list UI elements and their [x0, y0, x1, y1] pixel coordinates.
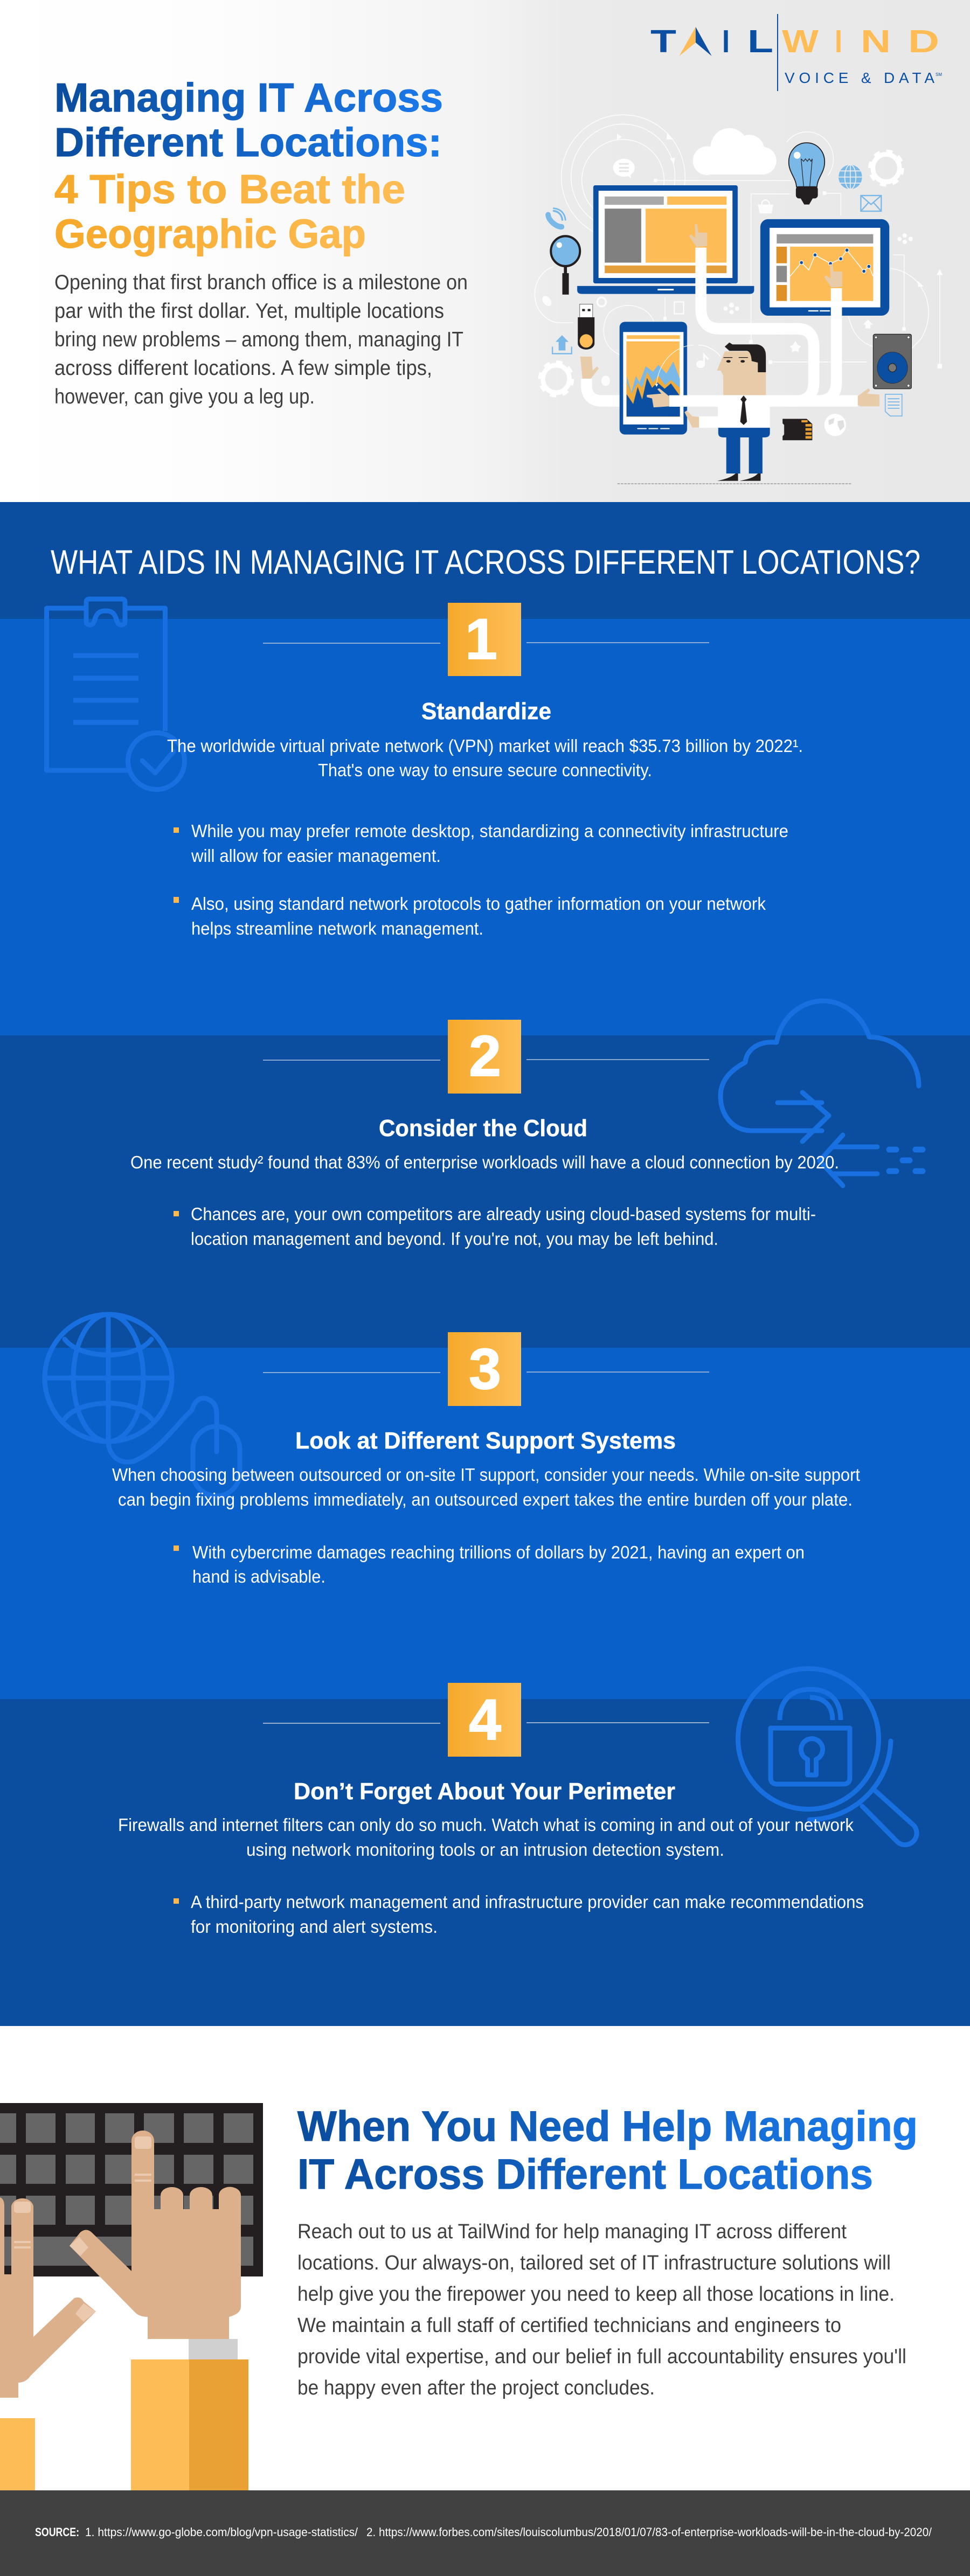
icon: light bulb [789, 143, 824, 205]
logo: TailWind Voice & Data: I [835, 24, 842, 59]
tip 3 heading: Look at Different Support Systems [295, 1428, 676, 1454]
tip 2 bullet [174, 1204, 816, 1249]
intro text [54, 271, 468, 408]
icon: sd card [782, 419, 812, 440]
call to action text: help give you the firepower you need to keep all those locations in line. [297, 2283, 895, 2306]
tip 1 paragraph: That's one way to ensure secure connectivity. [318, 760, 652, 780]
illustration: hands typing on keyboard [0, 2103, 263, 2490]
footer: sources: 1. https://www.go-globe.com/blog/vpn-usage-statistics/ [85, 2525, 358, 2539]
tip 3 bullet: With cybercrime damages reaching trillions of dollars by 2021, having an expert on [192, 1542, 805, 1562]
title [54, 75, 443, 256]
tip 1 paragraph: The worldwide virtual private network (VPN) market will reach $35.73 billion by 2022¹. [167, 736, 803, 756]
tip 2 paragraph: One recent study² found that 83% of enterprise workloads will have a cloud connection by 2020. [130, 1152, 839, 1172]
call to action text [297, 2220, 906, 2399]
logo: TailWind Voice & Data: SM [936, 72, 942, 77]
tip 1 bullet two [174, 894, 766, 938]
intro text: par with the first dollar. Yet, multiple locations [54, 300, 444, 323]
icon: globe and mouse [45, 1314, 240, 1496]
number badge 4 [263, 1683, 709, 1757]
icon: upload [552, 335, 572, 354]
tip 2 bullet: Chances are, your own competitors are already using cloud-based systems for multi- [191, 1204, 816, 1224]
icon: clipboard [46, 599, 184, 790]
icon: envelope [861, 196, 881, 211]
sleeves [189, 2339, 238, 2359]
tip 3 paragraph: can begin fixing problems immediately, an outsourced expert takes the entire burden off your plate. [118, 1489, 853, 1509]
call to action text: be happy even after the project concludes. [297, 2377, 655, 2399]
title: Managing IT Across [54, 75, 443, 120]
band: section heading [0, 502, 970, 619]
arm to left raised hand [586, 379, 621, 401]
icon: gear top right [870, 151, 902, 185]
tip 1 bullet two: helps streamline network management. [191, 918, 483, 938]
number badge 1: 1 [465, 607, 497, 671]
icon: cloud [693, 128, 777, 175]
logo: TailWind Voice & Data: I [722, 24, 730, 59]
icon: cloud with arrows [720, 1001, 923, 1186]
icon: usb drive [578, 304, 594, 350]
left hand [0, 2197, 96, 2398]
panel: tip 4 Don't Forget About Your Perimeter [0, 1669, 970, 2026]
number badge 2: 2 [469, 1024, 501, 1088]
hands [580, 224, 879, 428]
title: 4 Tips to Beat the [54, 166, 405, 212]
icon: tablet with chart [620, 322, 694, 435]
logo: TailWind Voice & Data: D [908, 24, 939, 59]
call to action heading: When You Need Help Managing [297, 2102, 918, 2150]
tip 2 bullet: location management and beyond. If you're not, you may be left behind. [191, 1229, 718, 1249]
right hand [70, 2131, 241, 2339]
hero panel [0, 0, 970, 502]
logo: TailWind Voice & Data: W [782, 24, 819, 59]
icon: gear bottom left [540, 363, 572, 395]
icon: earth [824, 414, 846, 436]
footer: sources [0, 2490, 970, 2576]
panel: call to action [0, 2026, 970, 2490]
arc from head over tablet [698, 345, 720, 356]
ground line [618, 483, 851, 484]
tip 4 bullet: for monitoring and alert systems. [191, 1917, 438, 1937]
title: Different Locations: [54, 120, 442, 165]
tip 1 bullet one: While you may prefer remote desktop, standardizing a connectivity infrastructure [191, 821, 788, 841]
tip 1 heading: Standardize [421, 698, 551, 725]
panel: tip 2 Consider the Cloud [0, 1001, 970, 1348]
panel: tip 1 Standardize [0, 599, 970, 1035]
call to action text: We maintain a full staff of certified technicians and engineers to [297, 2314, 841, 2337]
tip 3 bullet: hand is advisable. [192, 1567, 325, 1586]
person [699, 343, 770, 481]
tip 3 bullet [174, 1542, 805, 1586]
tip 3 paragraph: When choosing between outsourced or on-site IT support, consider your needs. While on-site support [112, 1465, 860, 1485]
intro text: Opening that first branch office is a milestone on [54, 271, 468, 294]
tip 1 bullet one: will allow for easier management. [191, 846, 441, 866]
panel: tip 3 Look at Different Support Systems [0, 1314, 970, 1699]
tip 4 heading: Don’t Forget About Your Perimeter [294, 1778, 675, 1805]
icon: document [885, 394, 902, 416]
illustration: IT worker connected to devices [535, 115, 942, 484]
number badge 3: 3 [469, 1336, 501, 1401]
call to action text: locations. Our always-on, tailored set of IT infrastructure solutions will [297, 2252, 891, 2274]
tip 4 paragraph: using network monitoring tools or an intrusion detection system. [246, 1840, 724, 1860]
intro text: bring new problems – among them, managing IT [54, 328, 463, 351]
logo: TailWind Voice & Data: VOICE & DATA [785, 69, 934, 86]
footer: sources: SOURCE: [35, 2525, 79, 2539]
footer: sources: 2. https://www.forbes.com/sites/louiscolumbus/2018/01/07/83-of-enterprise-workloads-will-be-in-the-cloud-by-2020/ [366, 2525, 932, 2539]
icon: magnifying glass [551, 236, 580, 295]
intro text: across different locations. A few simple tips, [54, 357, 432, 380]
tip 2 heading: Consider the Cloud [379, 1115, 587, 1141]
icon: hard drive [873, 334, 912, 389]
tip 1 paragraph [167, 736, 803, 780]
call to action heading [297, 2102, 918, 2198]
white arms [701, 248, 836, 401]
icon: padlock magnifier [738, 1669, 917, 1845]
title: Geographic Gap [54, 211, 366, 256]
tip 4 bullet: A third-party network management and infrastructure provider can make recommendations [191, 1892, 864, 1912]
tip 4 paragraph: Firewalls and internet filters can only do so much. Watch what is coming in and out of your network [118, 1815, 854, 1835]
call to action text: provide vital expertise, and our belief in full accountability ensures you'll [297, 2345, 906, 2368]
logo: TailWind Voice & Data: T [650, 24, 676, 59]
tip 1 bullet two: Also, using standard network protocols to gather information on your network [191, 894, 766, 914]
number badge 3 [263, 1332, 709, 1406]
number badge 4: 4 [469, 1687, 501, 1752]
decorative connector lines and arcs [535, 115, 942, 368]
tip 4 paragraph [118, 1815, 854, 1860]
tip 3 paragraph [112, 1465, 860, 1509]
tip 4 bullet [174, 1892, 864, 1937]
call to action text: Reach out to us at TailWind for help managing IT across different [297, 2220, 847, 2243]
icon: small faint shapes [541, 200, 913, 386]
icon: telephone [548, 208, 565, 227]
number badge 2 [263, 1020, 709, 1094]
intro text: however, can give you a leg up. [54, 385, 315, 408]
logo: TailWind Voice & Data [650, 14, 942, 91]
icon: globe [839, 165, 862, 189]
call to action heading: IT Across Different Locations [297, 2150, 873, 2198]
icon: laptop [577, 185, 754, 294]
tip 1 bullet one [174, 821, 788, 866]
logo: TailWind Voice & Data: N [861, 24, 891, 59]
icon: chat bubble [613, 159, 635, 178]
logo: TailWind Voice & Data: L [747, 24, 773, 59]
icon: monitor with chart [760, 219, 889, 316]
number badge 1 [263, 603, 709, 676]
